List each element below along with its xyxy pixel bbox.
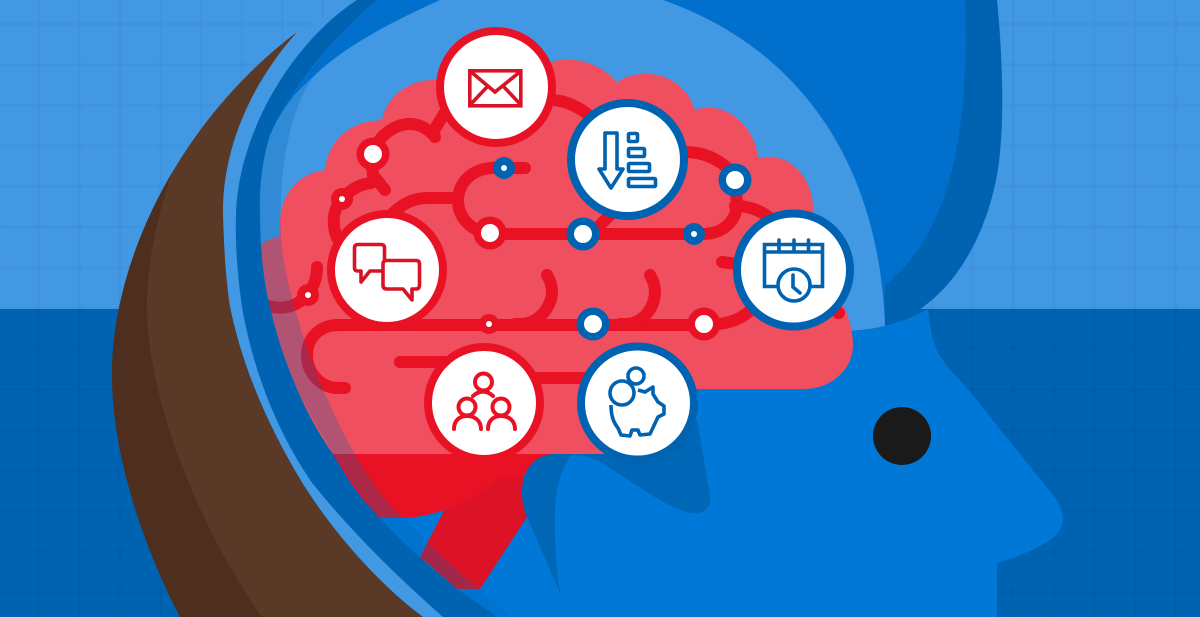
- node: small red lower: [479, 314, 499, 334]
- brain pale body: [240, 60, 853, 454]
- neck shadow: [522, 420, 710, 595]
- brain lower red band: [300, 453, 560, 518]
- node: small red left: [297, 284, 319, 306]
- head face profile: [255, 300, 1063, 617]
- brain stem: [420, 454, 540, 589]
- node: blue ring centre: [566, 218, 600, 250]
- node: red ring lower right: [688, 308, 720, 340]
- circuit wires: [265, 100, 839, 388]
- node: blue ring upper right: [718, 164, 752, 196]
- node: white red ring top left: [356, 138, 390, 170]
- glass dome of the head: [255, 0, 885, 331]
- node: small blue right: [683, 223, 705, 245]
- icon: envelope badge: [440, 31, 552, 143]
- dark rim of the head: [236, 0, 505, 617]
- tinted glass band over the brain: [248, 77, 510, 617]
- icon: chat bubbles badge: [331, 214, 443, 326]
- icon: calendar with clock badge: [737, 214, 850, 326]
- icon: people group badge: [428, 347, 540, 459]
- light outer ring of the head: [223, 0, 505, 617]
- eye: [873, 407, 931, 465]
- node: blue ring lower: [576, 308, 610, 340]
- hair back: darker top of head: [640, 0, 985, 335]
- node: small red upper: [331, 188, 353, 210]
- dark hair crescent: [112, 172, 262, 617]
- icon: sort arrow and bars badge: [571, 103, 684, 216]
- node: small blue top: [493, 157, 515, 179]
- node: white red ring centre: [474, 216, 506, 250]
- icon: piggy bank badge: [581, 346, 694, 460]
- brown hair: [100, 32, 423, 617]
- hair streak: [885, 0, 1002, 327]
- rim highlight wedge: [270, 0, 440, 135]
